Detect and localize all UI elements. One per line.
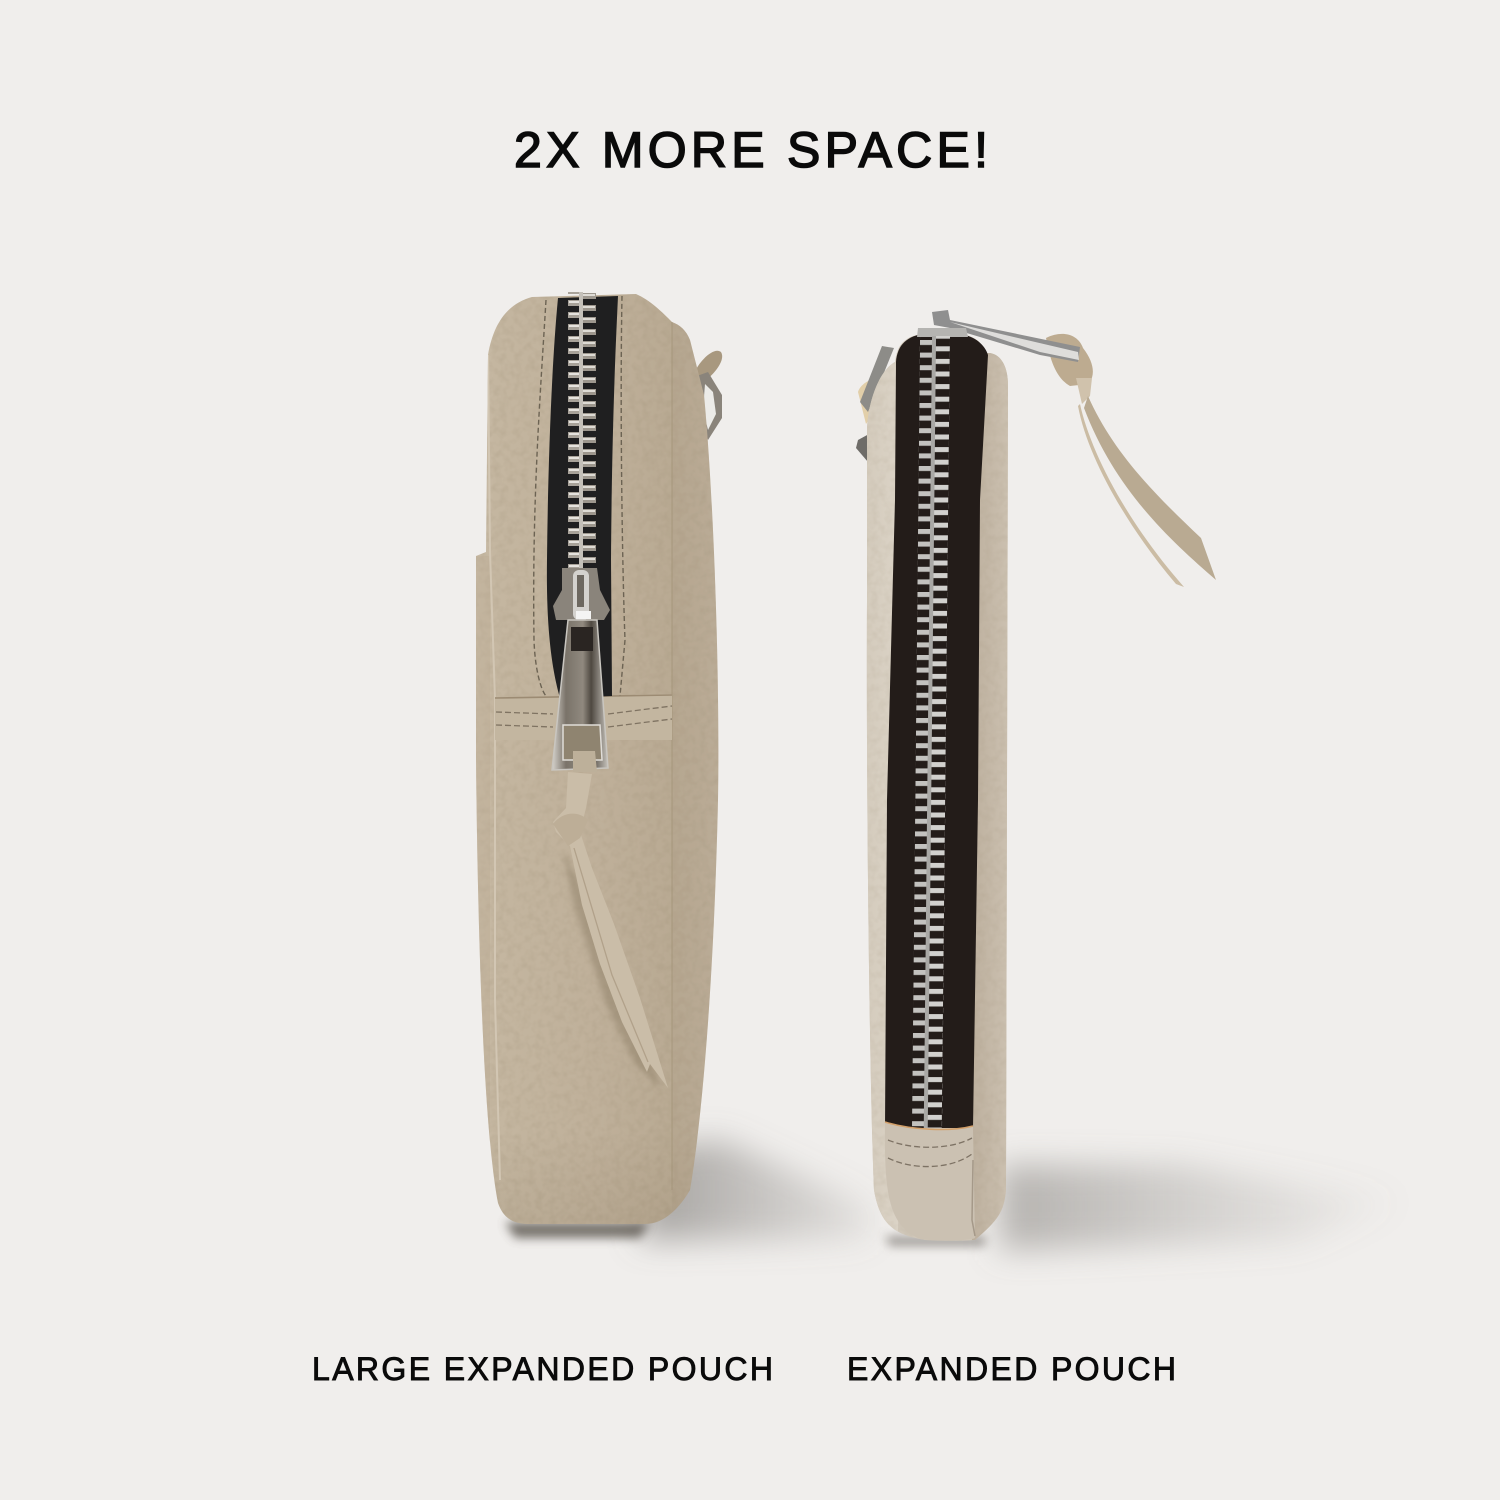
strap ring xyxy=(694,351,722,440)
title: 2X MORE SPACE! xyxy=(514,122,988,178)
zipper tape xyxy=(885,334,988,1128)
tassel and metal pull xyxy=(932,310,1216,587)
pocket band xyxy=(495,694,672,740)
tassel shadow xyxy=(563,850,661,1088)
label: large expanded pouch: LARGE EXPANDED POUCH xyxy=(312,1351,773,1387)
zipper edge stitching xyxy=(534,296,625,696)
cast shadows xyxy=(505,1140,1410,1250)
leather zip pull tassel xyxy=(553,772,668,1088)
product: expanded pouch xyxy=(856,310,1216,1250)
zipper teeth xyxy=(912,336,950,1128)
zipper slider xyxy=(552,568,610,772)
zipper slider at top xyxy=(917,328,968,337)
pouch body xyxy=(470,290,725,1236)
left side clip xyxy=(856,346,894,462)
infographic canvas xyxy=(314,131,1334,1381)
product: large expanded pouch xyxy=(470,290,725,1236)
stitched bottom end tab xyxy=(885,1122,975,1240)
label: expanded pouch: EXPANDED POUCH xyxy=(847,1351,1176,1387)
zipper teeth xyxy=(567,292,597,574)
zipper tape xyxy=(547,296,618,698)
pouch body xyxy=(862,330,1012,1250)
